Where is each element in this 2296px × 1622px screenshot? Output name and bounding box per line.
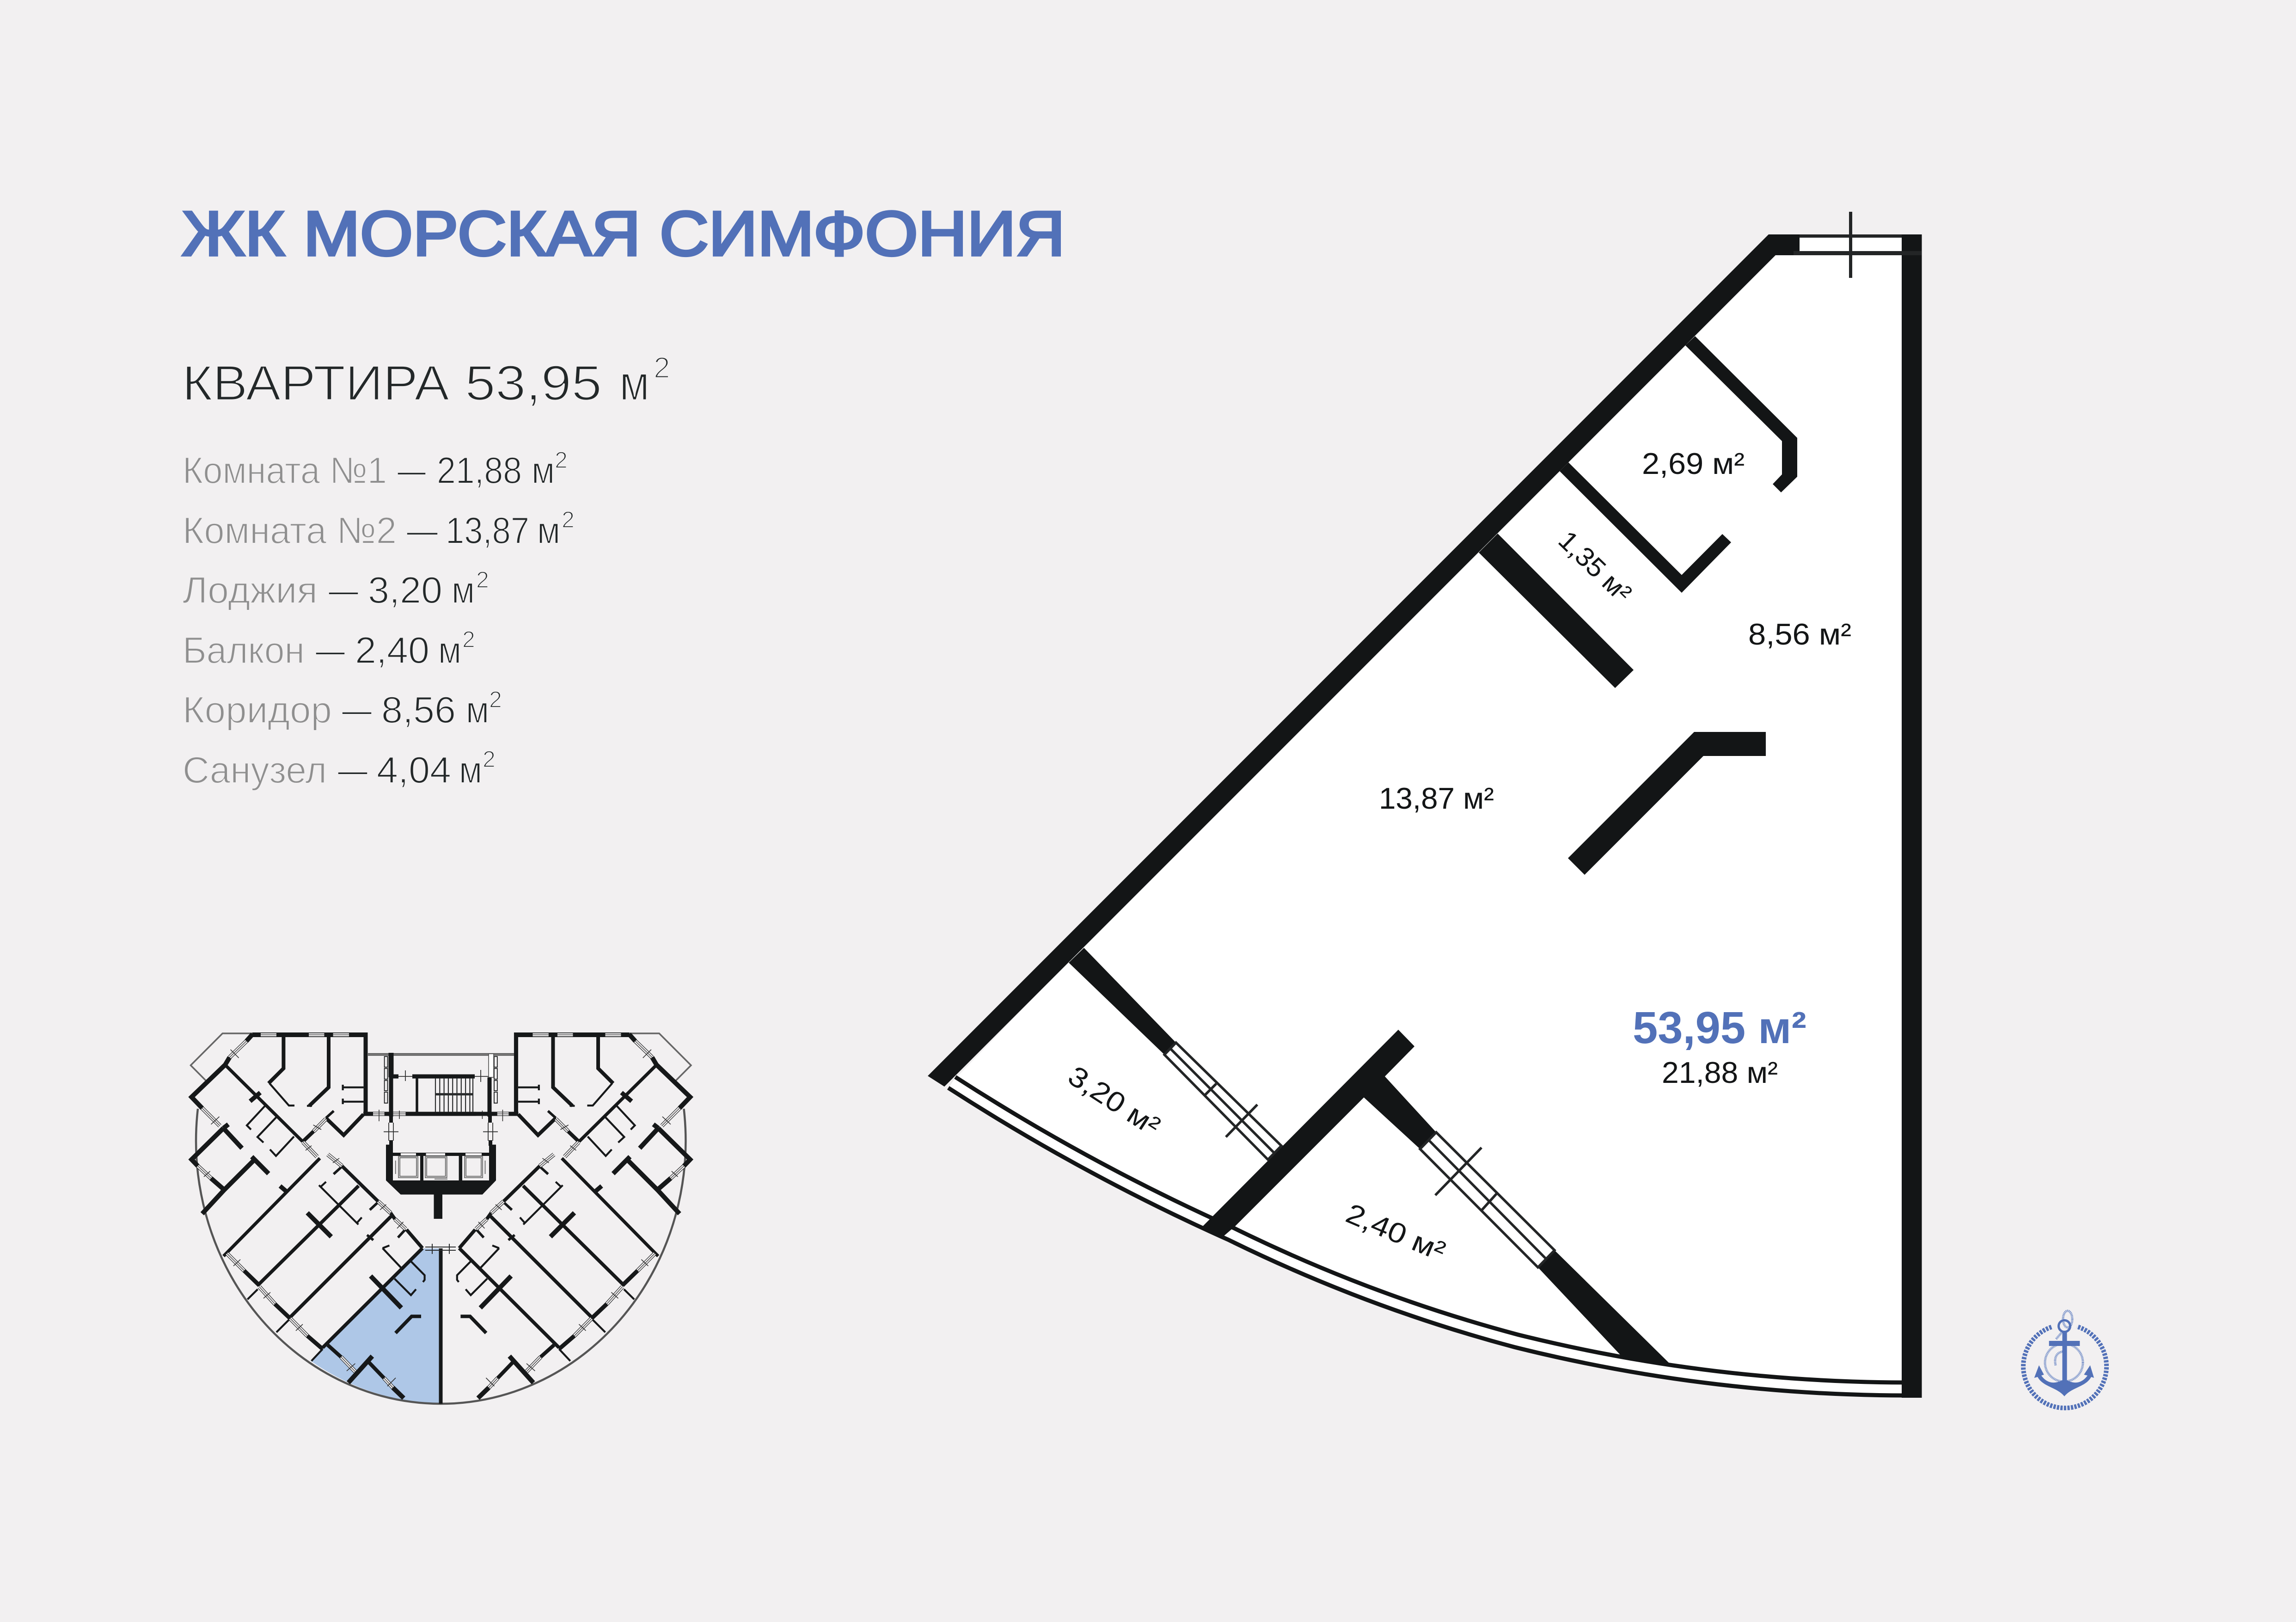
central axis wall (439, 1248, 443, 1404)
room label: 21,88: 21,88 м² (1662, 1056, 1778, 1089)
list row: balcony: 2 (462, 627, 475, 652)
stair flight (435, 1078, 473, 1112)
list row: room 1: 21,88 (437, 450, 522, 492)
list row: loggia: 3,20 (368, 570, 442, 611)
core: stairs and elevators (368, 1053, 514, 1219)
white shaft block (489, 1054, 494, 1077)
core walls (368, 1053, 514, 1146)
central stem wall (434, 1194, 442, 1219)
thick partition (1479, 534, 1634, 688)
outer diagonal wall (928, 234, 1800, 1087)
room label: 8,56: 8,56 м² (1748, 617, 1851, 651)
window: top (1794, 212, 1922, 278)
balcony rail (190, 1033, 252, 1081)
thick walls (252, 1032, 367, 1037)
list row: corridor: м (466, 689, 489, 731)
balcony back wall, lower (1538, 1250, 1670, 1364)
list row: room 2 (183, 507, 575, 552)
list row: balcony: — (316, 630, 345, 671)
heading: apartment area (182, 351, 670, 411)
room label: 2,40: 2,40 м² (1341, 1197, 1450, 1267)
list row: room 1: м (532, 450, 555, 492)
key plan of the floor (190, 1032, 691, 1404)
list row: loggia (183, 567, 489, 611)
window: balcony (1420, 1132, 1555, 1267)
toilet wall (1560, 462, 1731, 593)
balcony back wall, upper (1364, 1076, 1436, 1149)
loggia back wall (1069, 948, 1176, 1055)
rope coil (2045, 1311, 2083, 1382)
list row: bathroom: 4,04 (377, 750, 451, 791)
list row: room 2: 13,87 (446, 510, 529, 552)
elevator block (386, 1145, 496, 1195)
main floor plan (928, 212, 1922, 1398)
heading: apartment area: м (619, 355, 649, 411)
window: loggia (1164, 1043, 1281, 1160)
list row: balcony: м (438, 630, 461, 671)
list row: corridor: — (342, 689, 372, 731)
list row: corridor: 8,56 (381, 689, 456, 731)
cross walls at diagonals (250, 1093, 287, 1192)
small L wall (396, 1316, 421, 1333)
room label: 3,20: 3,20 м² (1063, 1060, 1166, 1142)
thin partitions (247, 1083, 425, 1361)
window cross ticks (204, 1050, 403, 1386)
highlighted apartment on key plan (311, 1248, 441, 1404)
list row: loggia: — (329, 570, 358, 611)
list row: bathroom (183, 746, 496, 791)
room label: 13,87: 13,87 м² (1379, 781, 1494, 815)
list row: loggia: 2 (476, 567, 489, 593)
left half of building (190, 1032, 444, 1404)
right half of building, mirrored (438, 1032, 691, 1404)
room label: 1,35: 1,35 м² (1553, 525, 1637, 608)
apartment white floor (952, 238, 1909, 1392)
list row: loggia: м (452, 570, 475, 611)
list row: room 2: Комната №2 (183, 510, 397, 552)
list row: bathroom: 2 (483, 746, 496, 772)
list row: room 1 (183, 447, 568, 492)
list row: bathroom: Санузел (183, 750, 327, 791)
bathroom wall (1685, 336, 1797, 492)
list row: room 2: м (537, 510, 560, 552)
curved glazing band (952, 1082, 1904, 1389)
right wall (1902, 234, 1922, 1398)
total area label: 53,95 м² (1633, 1002, 1806, 1053)
list row: room 2: — (407, 510, 438, 552)
elevator doors and cabins (396, 1153, 485, 1179)
list row: room 2: 2 (562, 507, 575, 533)
thin closets (247, 1106, 294, 1156)
partition between loggia and balcony (1203, 1030, 1414, 1238)
heading: apartment area: 2 (654, 351, 670, 384)
list row: room 1: — (398, 450, 426, 492)
list row: balcony: Балкон (183, 630, 305, 671)
list row: bathroom: м (459, 750, 482, 791)
heading: apartment area: КВАРТИРА (182, 355, 450, 411)
list row: loggia: Лоджия (183, 570, 318, 611)
outer facade arc (196, 1109, 441, 1404)
list row: bathroom: — (338, 750, 367, 791)
list row: room 1: Комната №1 (183, 450, 387, 492)
entrance window on axis (425, 1244, 456, 1254)
storage cells (385, 1057, 387, 1103)
rope ring (2023, 1327, 2106, 1408)
short wall stubs (326, 1111, 405, 1240)
list row: corridor (183, 687, 502, 731)
list row: balcony (183, 627, 475, 671)
list row: balcony: 2,40 (355, 630, 429, 671)
logo: anchor emblem (2023, 1311, 2106, 1408)
room list (183, 447, 575, 791)
title: ЖК МОРСКАЯ СИМФОНИЯ (182, 198, 1065, 269)
central L wall (1568, 732, 1766, 875)
list row: corridor: 2 (489, 687, 502, 713)
anchor ring (2059, 1321, 2070, 1332)
anchor body (2034, 1332, 2094, 1396)
window frames (198, 1035, 406, 1388)
walls (928, 234, 1922, 1398)
room label: 2,69: 2,69 м² (1642, 447, 1745, 480)
heading: apartment area: 53,95 (465, 355, 602, 411)
stair landing (435, 1093, 473, 1095)
list row: corridor: Коридор (183, 689, 332, 731)
list row: room 1: 2 (555, 447, 568, 473)
